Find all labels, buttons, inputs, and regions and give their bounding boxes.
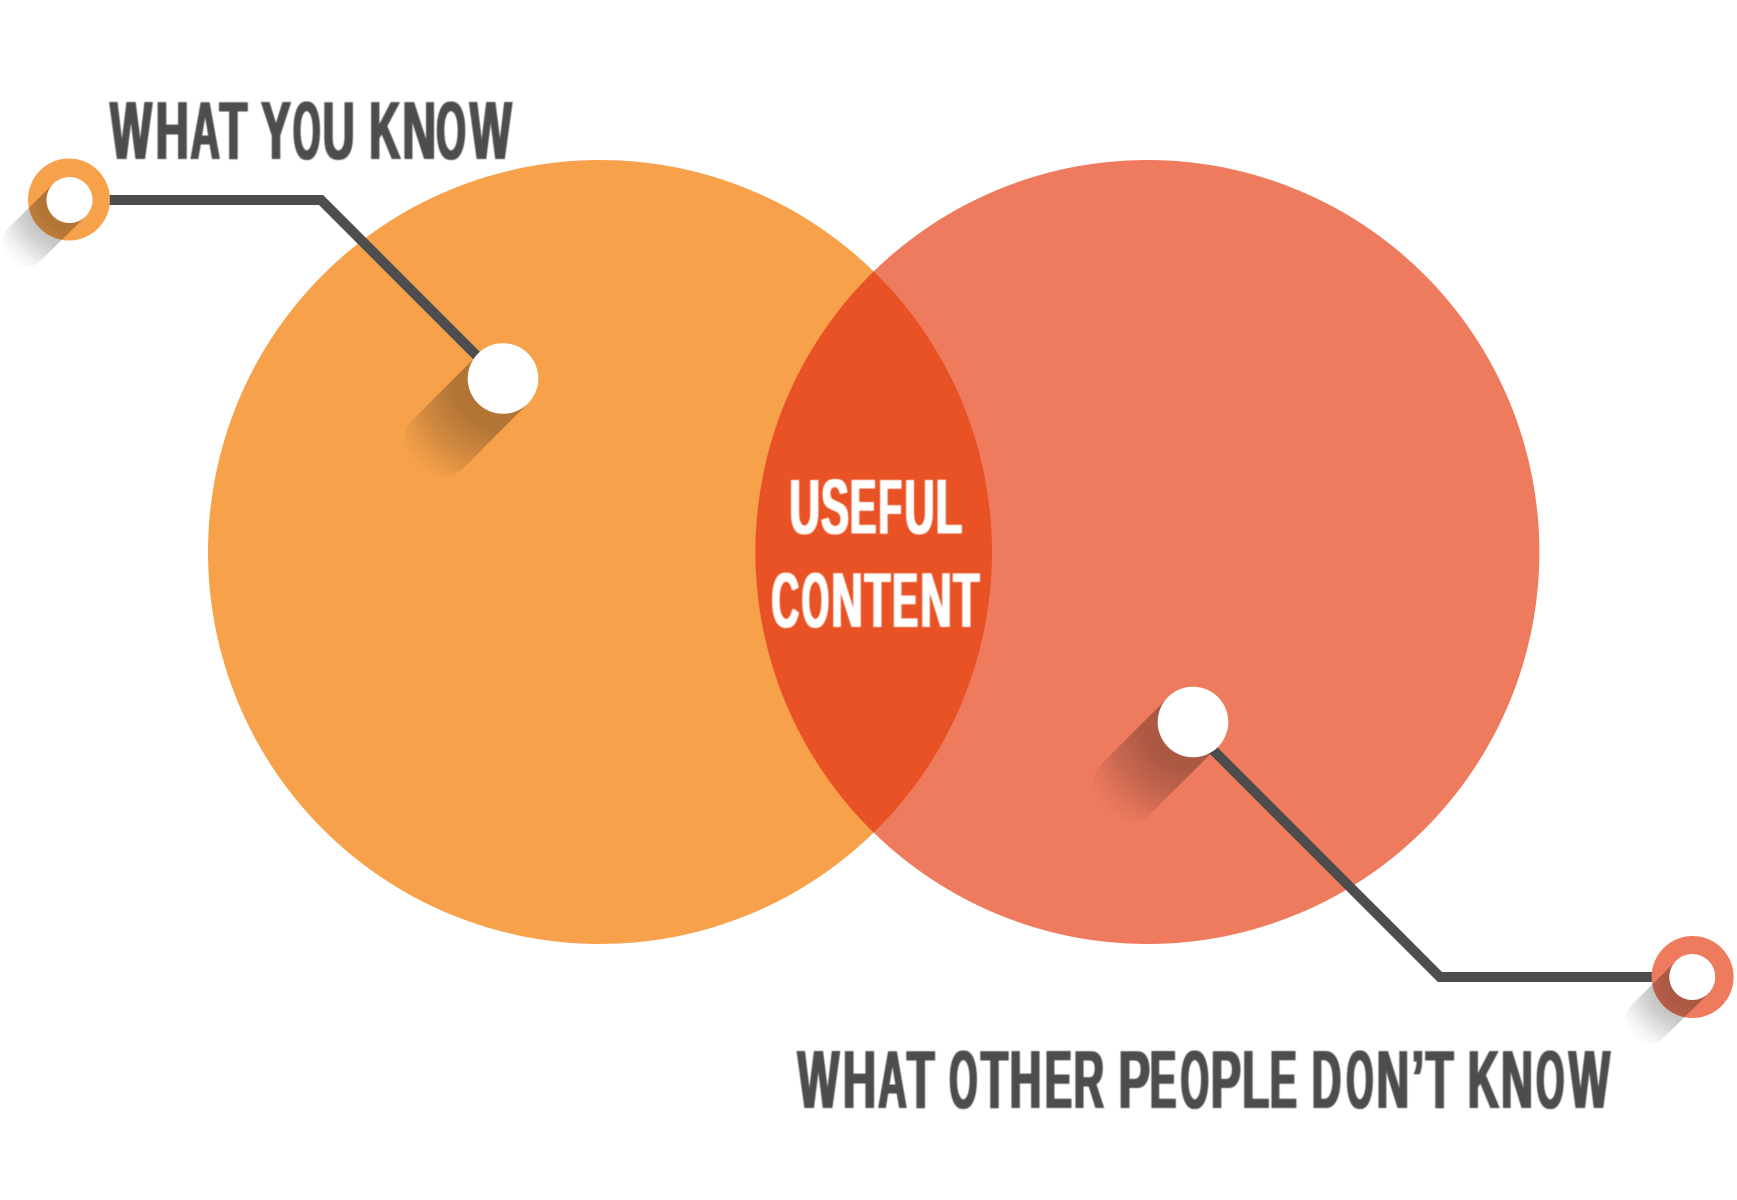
label: content: O xyxy=(802,556,829,644)
label: what you know: N xyxy=(402,84,436,177)
label: what other people don't know: W xyxy=(1569,1033,1610,1126)
label: content: N xyxy=(831,556,863,644)
label: what other people don't know: R xyxy=(1074,1033,1104,1126)
overlap: useful content xyxy=(755,271,992,833)
label: what you know: O xyxy=(436,84,466,177)
label: what other people don't know: A xyxy=(878,1033,907,1126)
marker: right ring with shadow xyxy=(1648,936,1734,1021)
label: what other people don't know: L xyxy=(1242,1033,1269,1126)
label: what other people don't know: ’ xyxy=(1412,1033,1424,1126)
label: what other people don't know: P xyxy=(1211,1033,1241,1126)
label: what you know: A xyxy=(190,84,220,177)
label: content: C xyxy=(772,556,799,644)
label: what you know: W xyxy=(470,84,512,177)
label: what you know: O xyxy=(293,84,320,177)
label: what other people don't know: W xyxy=(798,1033,840,1126)
label: content: N xyxy=(920,556,952,644)
label: what you know: W xyxy=(110,84,152,177)
circle: what other people don't know xyxy=(755,160,1539,944)
label: what other people don't know: H xyxy=(1010,1033,1042,1126)
label: what other people don't know: P xyxy=(1118,1033,1150,1126)
label: useful: U xyxy=(905,462,934,550)
label: useful: S xyxy=(821,462,849,550)
label: what other people don't know: H xyxy=(843,1033,876,1126)
label: useful: F xyxy=(878,462,902,550)
label: useful: E xyxy=(850,462,876,550)
connector line: what you know xyxy=(100,200,503,382)
marker: white dot in left circle with long shadow xyxy=(439,343,538,443)
label: content: T xyxy=(953,556,979,644)
label: useful: U xyxy=(790,462,820,550)
label: what you know: T xyxy=(220,84,247,177)
label: what other people don't know: O xyxy=(949,1033,977,1126)
connector line: what other people don't know xyxy=(1187,724,1660,977)
label: what other people don't know: O xyxy=(1346,1033,1373,1126)
label: what you know: U xyxy=(323,84,355,177)
label: what other people don't know: N xyxy=(1501,1033,1533,1126)
label: what other people don't know: D xyxy=(1312,1033,1341,1126)
label: what other people don't know: N xyxy=(1376,1033,1409,1126)
label: what you know: K xyxy=(369,84,401,177)
label: what other people don't know: E xyxy=(1150,1033,1176,1126)
label: what other people don't know: E xyxy=(1270,1033,1297,1126)
label: what you know: Y xyxy=(261,84,291,177)
circle: what you know xyxy=(208,160,992,944)
label: what other people don't know: T xyxy=(981,1033,1008,1126)
marker: left ring with shadow xyxy=(25,158,110,244)
label: content: T xyxy=(864,556,890,644)
label: useful: L xyxy=(936,462,962,550)
label: what other people don't know: O xyxy=(1536,1033,1564,1126)
label: what you know: H xyxy=(156,84,189,177)
marker: white dot in right circle with long shadow xyxy=(1127,687,1228,788)
label: what other people don't know: T xyxy=(1426,1033,1454,1126)
label: what other people don't know: K xyxy=(1468,1033,1499,1126)
label: content: E xyxy=(892,556,918,644)
label: what other people don't know: E xyxy=(1045,1033,1072,1126)
label: what other people don't know: T xyxy=(907,1033,935,1126)
label: what other people don't know: O xyxy=(1181,1033,1209,1126)
